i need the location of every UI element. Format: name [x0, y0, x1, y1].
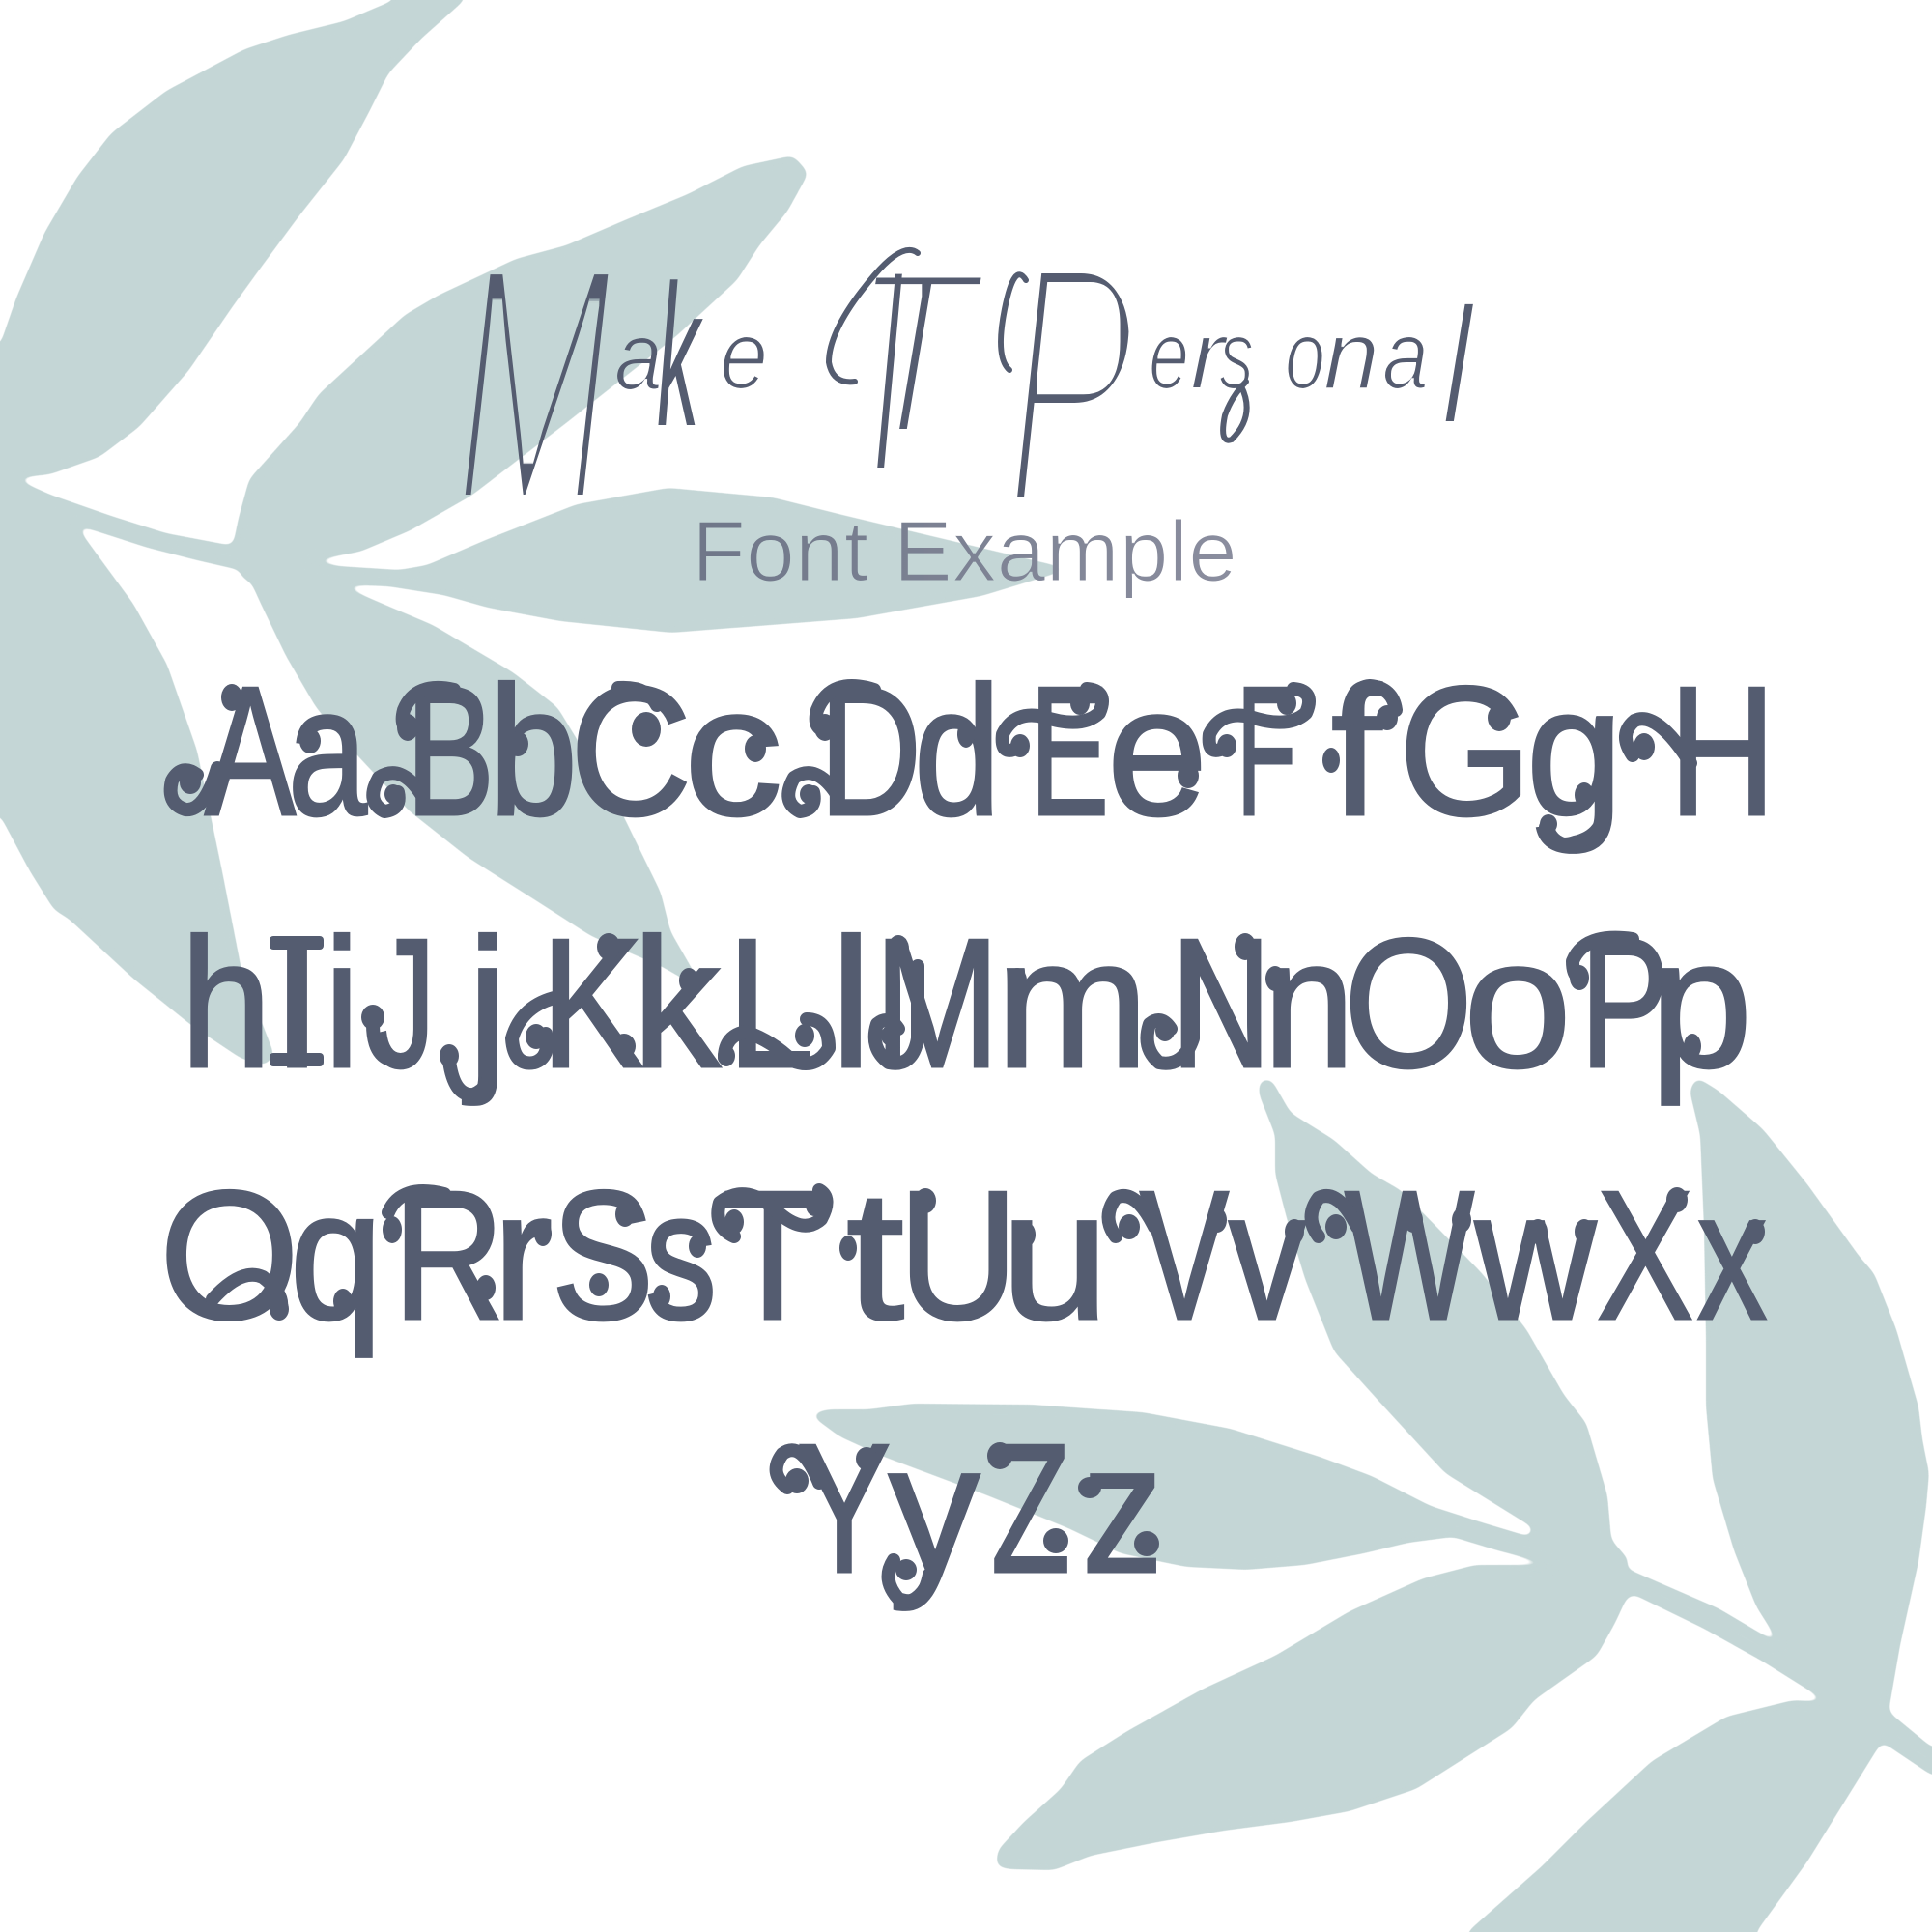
alphabet line 2: I [271, 901, 323, 1106]
alphabet line 2: O [1344, 901, 1473, 1106]
alphabet line 3: Q [159, 1153, 299, 1358]
alphabet line 2 [181, 901, 1752, 1106]
alphabet line 1: E [1030, 649, 1109, 854]
alphabet line 2: P [1580, 901, 1669, 1106]
alphabet line 3: v [1229, 1153, 1306, 1358]
alphabet line 4: z [1082, 1406, 1163, 1611]
alphabet line 2: p [1650, 901, 1752, 1106]
title: Make It Personal: l [1441, 274, 1476, 458]
alphabet line 3: T [723, 1153, 823, 1358]
alphabet line 2: h [181, 901, 271, 1106]
alphabet line 4: y [889, 1406, 980, 1611]
alphabet line 2: M [874, 901, 1000, 1106]
title: Make It Personal: T [850, 220, 988, 485]
alphabet line 2 flourishes [270, 933, 1701, 1094]
alphabet line 3: w [1474, 1153, 1597, 1358]
alphabet line 2: J [372, 901, 436, 1106]
alphabet line 1: C [570, 649, 692, 854]
title: Make It Personal: r [1190, 301, 1229, 410]
alphabet line 4 [798, 1406, 1163, 1611]
alphabet line 3: t [846, 1153, 904, 1358]
alphabet line 1: d [914, 649, 1001, 854]
title: Make It Personal: s [1219, 301, 1254, 410]
title: Make It Personal: e [720, 301, 768, 410]
alphabet line 4 flourishes [777, 1442, 1159, 1601]
bottom-right leaf branch [810, 1077, 1932, 1932]
alphabet line 3: W [1345, 1153, 1474, 1358]
alphabet line 3 [166, 1188, 1768, 1358]
alphabet line 1: H [1669, 649, 1776, 854]
alphabet line 2: j [463, 901, 508, 1106]
alphabet line 3 flourishes [213, 1187, 1765, 1321]
alphabet line 3: U [898, 1153, 1018, 1358]
alphabet line 1: a [288, 649, 367, 854]
alphabet line 2: n [1264, 901, 1354, 1106]
alphabet line 3: s [645, 1153, 717, 1358]
title: Make It Personal: k [657, 244, 703, 469]
alphabet line 3: r [493, 1153, 553, 1358]
alphabet line 2: K [541, 901, 643, 1106]
alphabet line 3: x [1697, 1153, 1767, 1358]
title: Make It Personal: P [1005, 188, 1136, 580]
alphabet line 1: c [684, 649, 782, 854]
alphabet line 2: o [1463, 901, 1572, 1106]
alphabet line 1 [205, 649, 1776, 854]
title: Make It Personal: M [454, 201, 615, 568]
subtitle: Font Example: Font Example [692, 503, 1237, 599]
alphabet line 3: u [1001, 1153, 1109, 1358]
alphabet line 1: G [1399, 649, 1532, 854]
alphabet line 1: D [819, 649, 922, 854]
alphabet line 1: F [1236, 649, 1296, 854]
alphabet line 3: R [393, 1153, 504, 1358]
alphabet line 2: m [996, 901, 1149, 1106]
alphabet line 3: X [1597, 1153, 1693, 1358]
alphabet line 1: B [406, 649, 495, 854]
title: Make It Personal: o [1285, 301, 1325, 410]
alphabet line 2: k [633, 901, 721, 1106]
alphabet line 2: L [727, 901, 814, 1106]
alphabet line 1: f [1331, 649, 1382, 854]
alphabet line 1: e [1107, 649, 1208, 854]
alphabet line 3: q [290, 1153, 383, 1358]
alphabet line 2: i [325, 901, 359, 1106]
title: Make It Personal: a [614, 302, 663, 411]
alphabet line 1 flourishes [171, 684, 1690, 844]
alphabet line 4: Z [991, 1406, 1070, 1611]
alphabet line 2: N [1171, 901, 1271, 1106]
alphabet line 3: V [1140, 1153, 1229, 1358]
alphabet line 1: b [489, 649, 578, 854]
top-left leaf branch [0, 0, 1070, 1065]
alphabet line 4: Y [798, 1406, 891, 1611]
alphabet line 2: l [831, 901, 871, 1106]
title: Make It Personal: I [868, 208, 907, 532]
title: Make It Personal: n [1323, 301, 1379, 410]
title: Make It Personal [454, 188, 1476, 580]
title: Make It Personal: a [1382, 301, 1429, 410]
alphabet line 3: S [552, 1153, 654, 1358]
alphabet line 1: A [205, 649, 296, 854]
title: Make It Personal: e [1149, 301, 1189, 410]
alphabet line 1: g [1526, 649, 1623, 854]
